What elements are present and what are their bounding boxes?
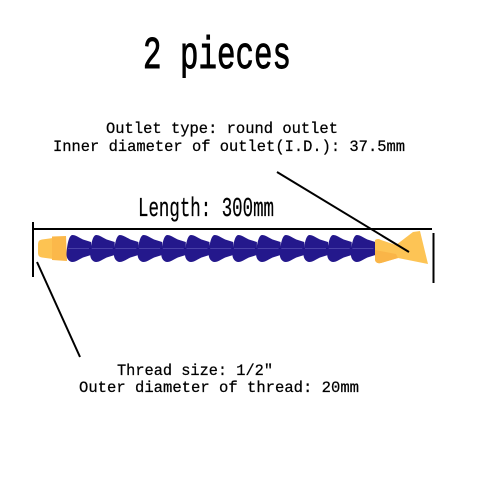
thread pointer line: [37, 262, 80, 357]
title: 2 pieces: [143, 31, 291, 82]
yellow round nozzle: [375, 231, 428, 264]
flexible hose product: [38, 231, 428, 264]
outlet type label: Outlet type: round outlet: [106, 120, 338, 138]
inner diameter label: Inner diameter of outlet(I.D.): 37.5mm: [53, 138, 405, 156]
thread size label: Thread size: 1/2": [117, 362, 273, 380]
threaded yellow connector: [38, 236, 67, 261]
length label: Length: 300mm: [138, 195, 274, 225]
length dimension line: [33, 222, 434, 283]
outer diameter label: Outer diameter of thread: 20mm: [79, 379, 359, 397]
outlet pointer line: [277, 172, 409, 252]
blue hose segments: [66, 235, 375, 262]
